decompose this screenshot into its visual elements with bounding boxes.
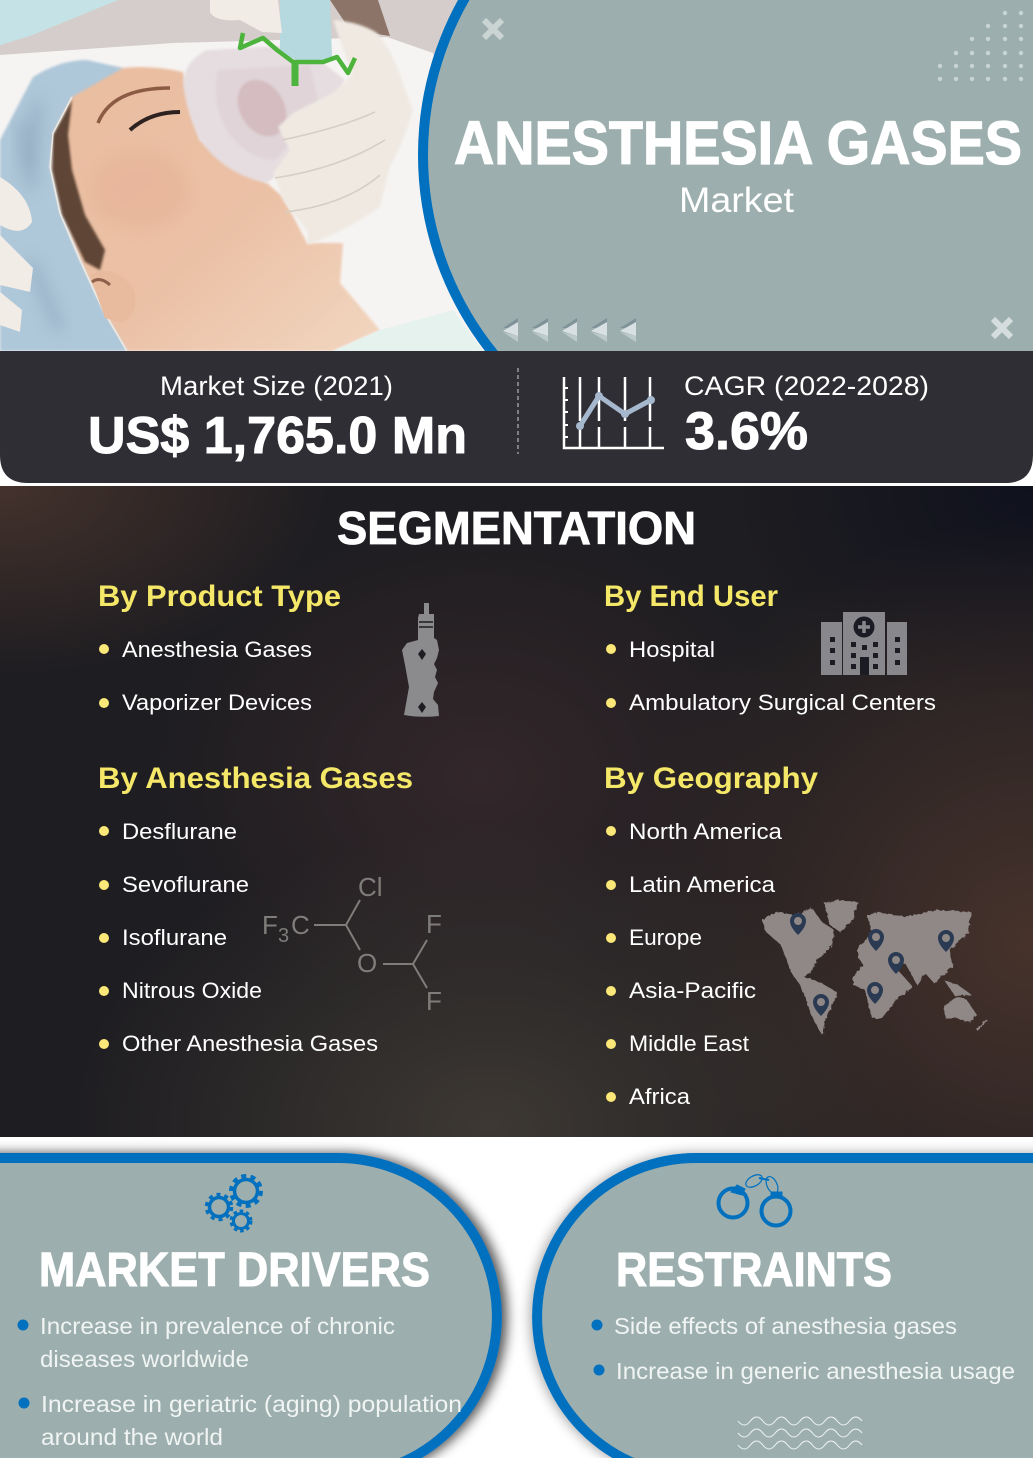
icon: vaporizer (402, 603, 439, 717)
heading: by anesthesia gases: By Anesthesia Gases (98, 762, 413, 795)
panel: market drivers (0, 1158, 497, 1458)
icon: molecule structure: O (357, 948, 377, 978)
subtitle: Market (679, 181, 794, 220)
list: regions: Europe (629, 925, 702, 950)
list: anesthesia gases: Nitrous Oxide (122, 978, 262, 1003)
list: anesthesia gases (99, 819, 378, 1056)
list: drivers: Increase in geriatric (aging) population (41, 1391, 462, 1417)
heading: by geography: By Geography (604, 762, 818, 795)
heading: by product type: By Product Type (98, 580, 341, 613)
list: drivers (18, 1313, 462, 1450)
list: anesthesia gases: Other Anesthesia Gases (122, 1031, 378, 1056)
icon: top cross (484, 20, 502, 38)
list: end users: Hospital (629, 637, 715, 662)
icon: handcuffs (718, 1172, 790, 1226)
list: drivers: around the world (41, 1424, 223, 1450)
panel: by product type (98, 580, 439, 717)
list: drivers: Increase in prevalence of chronic (40, 1313, 395, 1339)
list: end users (606, 637, 936, 715)
list: product types: Anesthesia Gases (122, 637, 312, 662)
list: regions: North America (629, 819, 783, 844)
list: end users: Ambulatory Surgical Centers (629, 690, 936, 715)
icon: molecule structure: F (426, 909, 442, 939)
icon: molecule structure: 3 (278, 925, 289, 947)
segmentation heading: SEGMENTATION (337, 502, 696, 554)
heading: restraints: RESTRAINTS (616, 1244, 892, 1297)
list: drivers: diseases worldwide (40, 1346, 249, 1372)
icon: gears (206, 1176, 261, 1231)
list: product types: Vaporizer Devices (122, 690, 312, 715)
icon: molecule structure (262, 872, 442, 1016)
list: anesthesia gases: Desflurane (122, 819, 237, 844)
heading: by end user: By End User (604, 580, 778, 613)
list: restraints (592, 1313, 1015, 1384)
list: regions: Asia-Pacific (629, 978, 756, 1003)
icon: molecule structure: C (291, 910, 310, 940)
stats bar (0, 351, 1033, 483)
header panel with blue arc (418, 0, 1033, 351)
arrow decoration (503, 318, 636, 342)
stat: market size label: Market Size (2021) (160, 371, 393, 401)
panel: restraints (537, 1158, 1033, 1458)
list: anesthesia gases: Sevoflurane (122, 872, 249, 897)
list: restraints: Side effects of anesthesia gases (614, 1313, 957, 1339)
panel: by geography (604, 762, 987, 1109)
stat: CAGR label: CAGR (2022-2028) (684, 371, 929, 401)
icon: molecule structure: F (426, 986, 442, 1016)
list: regions (606, 819, 783, 1109)
icon: molecule structure: F (262, 910, 278, 940)
panel: by anesthesia gases (98, 762, 442, 1056)
panel: by end user (604, 580, 936, 715)
icon: bottom cross (993, 319, 1011, 337)
icon: molecule structure: Cl (358, 872, 383, 902)
heading: market drivers: MARKET DRIVERS (39, 1244, 430, 1297)
stat: CAGR value: 3.6% (685, 402, 808, 461)
stat: market size value: US$ 1,765.0 Mn (88, 407, 467, 465)
icon: hospital (821, 612, 907, 675)
list: product types (99, 637, 312, 715)
list: regions: Latin America (629, 872, 776, 897)
icon: world map with pins (762, 900, 987, 1035)
list: restraints: Increase in generic anesthesia usage (616, 1358, 1015, 1384)
dot grid decoration (938, 11, 1023, 81)
photo: patient with anesthesia mask (0, 0, 520, 351)
icon: line chart (564, 377, 664, 448)
list: regions: Middle East (629, 1031, 749, 1056)
list: regions: Africa (629, 1084, 691, 1109)
list: anesthesia gases: Isoflurane (122, 925, 227, 950)
